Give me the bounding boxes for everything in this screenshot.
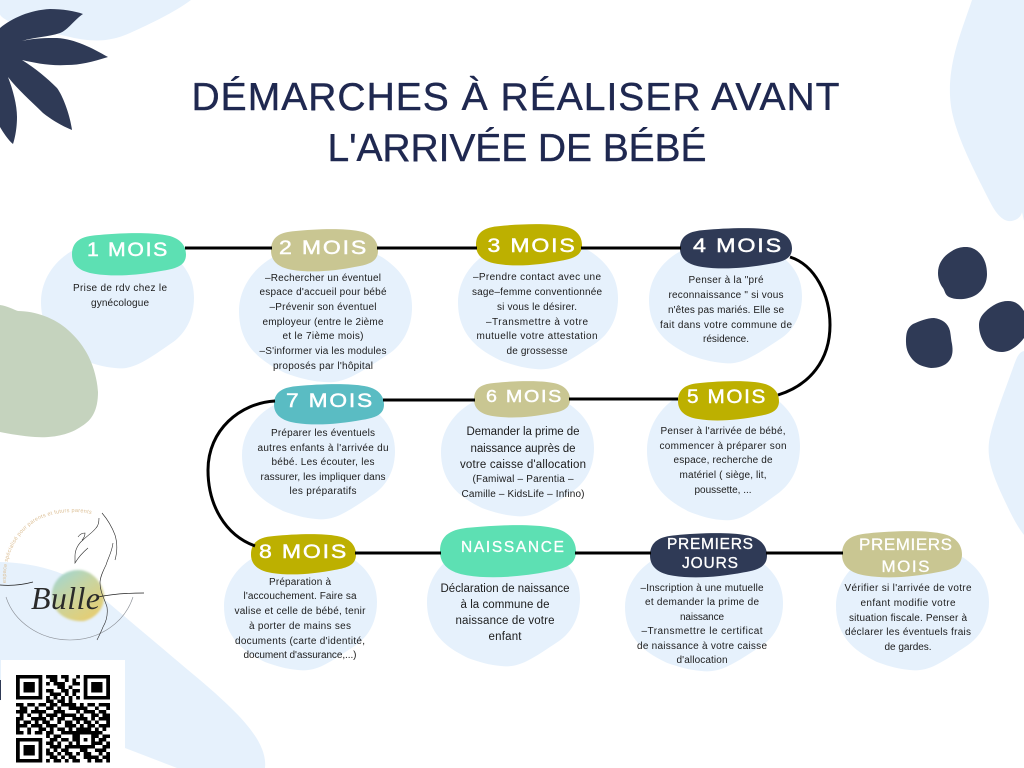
description: espace, recherche de	[674, 455, 773, 466]
step: 7 mois	[242, 384, 395, 519]
description	[844, 583, 972, 653]
description: bébé. Les écouter, les	[272, 457, 374, 468]
dots decoration	[906, 247, 1024, 368]
description	[440, 583, 570, 643]
description: commencer à préparer son	[660, 441, 786, 452]
description: employeur (entre le 2ième	[262, 317, 384, 328]
connector path	[185, 248, 843, 553]
description: Demander la prime de	[466, 426, 580, 438]
description: reconnaissance " si vous	[668, 290, 784, 301]
description	[660, 275, 792, 345]
badge label: 5 MOIS	[687, 387, 767, 408]
title	[192, 76, 840, 170]
description: et le 7ième mois)	[282, 331, 364, 342]
description: n'êtes pas mariés. Elle se	[668, 305, 784, 316]
badge: premiers jours	[650, 533, 767, 577]
badge: naissance	[440, 525, 576, 577]
badge label: JOURS	[682, 555, 738, 572]
badge: 3 mois	[476, 224, 582, 265]
badge: 2 mois	[271, 229, 378, 271]
description: de gardes.	[884, 642, 932, 653]
description: –Transmettre à votre	[486, 317, 588, 328]
description: naissance auprès de	[470, 443, 576, 455]
step: naissance	[427, 525, 580, 666]
badge label: 6 MOIS	[486, 386, 563, 406]
badge: 4 mois	[680, 228, 792, 268]
background shape: bottom left	[0, 562, 265, 768]
description: les préparatifs	[290, 486, 356, 497]
description	[460, 426, 586, 500]
description: sage–femme conventionnée	[472, 287, 602, 298]
background shape: right lower	[989, 351, 1024, 535]
badge: 5 mois	[678, 381, 779, 420]
description: –Inscription à une mutuelle	[640, 583, 764, 594]
badge: 6 mois	[474, 381, 570, 417]
description	[73, 283, 167, 309]
description	[660, 426, 786, 496]
background shape: top right	[950, 0, 1024, 221]
badge label	[859, 535, 952, 576]
badge: 8 mois	[251, 534, 356, 574]
badge label: 4 MOIS	[693, 236, 783, 257]
description: à porter de mains ses	[249, 621, 351, 632]
description: rassurer, les impliquer dans	[260, 472, 386, 483]
description: de grossesse	[506, 346, 568, 357]
title: DÉMARCHES À RÉALISER AVANT	[192, 76, 840, 119]
badge: 7 mois	[274, 384, 384, 424]
description	[637, 583, 767, 666]
description: autres enfants à l'arrivée du	[258, 443, 388, 454]
description: proposés par l'hôpital	[273, 361, 373, 372]
description: résidence.	[703, 334, 749, 345]
description: documents (carte d'identité,	[235, 636, 365, 647]
badge label: 1 MOIS	[87, 240, 169, 261]
step: 6 mois	[441, 381, 594, 516]
description: si vous le désirer.	[497, 302, 577, 313]
description: Vérifier si l'arrivée de votre	[844, 583, 972, 594]
description: –Rechercher un éventuel	[265, 273, 381, 284]
step: 1 mois	[41, 233, 194, 368]
description: naissance de votre	[456, 615, 554, 627]
description: –Prévenir son éventuel	[270, 302, 376, 313]
step: 8 mois	[224, 534, 377, 670]
description	[234, 577, 366, 661]
description: gynécologue	[91, 298, 149, 309]
step: 5 mois	[647, 381, 800, 520]
badge: 1 mois	[72, 233, 186, 275]
description: naissance	[680, 612, 724, 623]
description: Prise de rdv chez le	[73, 283, 167, 294]
step: 4 mois	[649, 228, 802, 363]
description: d'allocation	[676, 655, 728, 666]
badge label: PREMIERS	[859, 535, 952, 554]
badge label: 7 MOIS	[286, 391, 374, 412]
description: à la commune de	[460, 599, 550, 611]
description: de naissance à votre caisse	[637, 641, 767, 652]
description: l'accouchement. Faire sa	[244, 591, 357, 602]
badge label: PREMIERS	[667, 536, 753, 553]
badge label: 2 MOIS	[279, 238, 368, 259]
description: document d'assurance,...)	[244, 650, 356, 661]
description: enfant modifie votre	[860, 598, 956, 609]
step: 3 mois	[458, 224, 618, 369]
description: –S'informer via les modules	[260, 346, 386, 357]
description	[472, 272, 602, 357]
title: L'ARRIVÉE DE BÉBÉ	[328, 127, 706, 170]
step: premiers mois	[836, 531, 989, 670]
description: Penser à l'arrivée de bébé,	[660, 426, 786, 437]
logo: Bulle	[0, 509, 144, 640]
background shape: top left	[0, 0, 191, 40]
logo: Bulle: espace spécialisé pour parents et futurs parents	[2, 509, 92, 583]
QR code	[0, 660, 125, 768]
description: valise et celle de bébé, tenir	[234, 606, 366, 617]
description: votre caisse d'allocation	[460, 459, 586, 471]
badge label	[667, 536, 753, 572]
description: et demander la prime de	[645, 597, 759, 608]
description: enfant	[488, 631, 522, 643]
description	[258, 428, 388, 497]
logo: Bulle: Bulle	[31, 580, 100, 616]
step: 2 mois	[239, 229, 412, 382]
badge label: MOIS	[882, 557, 930, 576]
description: –Prendre contact avec une	[473, 272, 601, 283]
leaf decoration	[0, 9, 108, 144]
description: mutuelle votre attestation	[476, 331, 598, 342]
description: fait dans votre commune de	[660, 320, 792, 331]
description: situation fiscale. Penser à	[849, 613, 967, 624]
description: Camille – KidsLife – Infino)	[462, 489, 584, 500]
description: matériel ( siège, lit,	[680, 470, 766, 481]
description: Penser à la "pré	[688, 275, 764, 286]
description	[260, 273, 387, 372]
step: premiers jours	[625, 533, 783, 671]
description: (Famiwal – Parentia –	[472, 474, 574, 485]
badge label: NAISSANCE	[461, 539, 564, 556]
description: Préparation à	[269, 577, 331, 588]
description: poussette, ...	[694, 485, 752, 496]
description: espace d'accueil pour bébé	[260, 287, 387, 298]
badge label: 3 MOIS	[488, 236, 576, 257]
badge: premiers mois	[842, 531, 962, 577]
badge label: 8 MOIS	[259, 542, 348, 563]
description: déclarer les éventuels frais	[845, 627, 971, 638]
decorative green blob	[0, 305, 98, 437]
description: Préparer les éventuels	[271, 428, 375, 439]
description: Déclaration de naissance	[440, 583, 570, 595]
description: –Transmettre le certificat	[642, 626, 763, 637]
